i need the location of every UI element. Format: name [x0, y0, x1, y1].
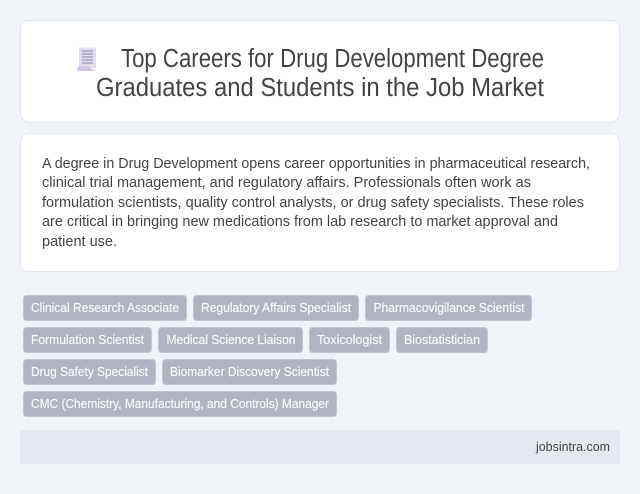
footer bar [20, 430, 620, 464]
tag: Regulatory Affairs Specialist [194, 296, 358, 320]
tag: Drug Safety Specialist: Drug Safety Specialist [31, 365, 148, 379]
tag: Pharmacovigilance Scientist: Pharmacovigilance Scientist [374, 301, 525, 315]
tag: Clinical Research Associate [24, 296, 186, 320]
description text: A degree in Drug Development opens career opportunities in pharmaceutical research, [42, 156, 590, 172]
career tags [24, 296, 532, 416]
panel: title header [20, 20, 620, 122]
tag: Biostatistician: Biostatistician [404, 333, 480, 347]
title text [96, 45, 544, 102]
tag: Biomarker Discovery Scientist: Biomarker Discovery Scientist [170, 365, 330, 379]
tag: Clinical Research Associate: Clinical Research Associate [31, 301, 179, 315]
panel: description [20, 134, 620, 272]
title text: Top Careers for Drug Development Degree [121, 45, 544, 73]
tag: Formulation Scientist: Formulation Scientist [31, 333, 145, 347]
tag: Pharmacovigilance Scientist [366, 296, 532, 320]
footer source text: jobsintra.com [535, 439, 610, 454]
tag: Biostatistician [396, 328, 488, 352]
tag: Biomarker Discovery Scientist [162, 360, 336, 384]
tag: Toxicologist: Toxicologist [317, 333, 383, 347]
tag: CMC Manager [24, 392, 336, 416]
description text: patient use. [42, 234, 117, 250]
description text [42, 156, 590, 250]
tag: Drug Safety Specialist [24, 360, 156, 384]
description text: are critical in bringing new medications from lab research to market approval and [42, 214, 558, 230]
description text: formulation scientists, quality control analysts, or drug safety specialists. These roles [42, 195, 584, 211]
tag: Regulatory Affairs Specialist: Regulatory Affairs Specialist [201, 301, 352, 315]
description text: clinical trial management, and regulatory affairs. Professionals often work as [42, 175, 531, 191]
title text: Graduates and Students in the Job Market [96, 74, 544, 102]
tag: CMC Manager: CMC (Chemistry, Manufacturing, and Controls) Manager [31, 397, 329, 411]
tag: Medical Science Liaison: Medical Science Liaison [166, 333, 296, 347]
icon: document scroll [77, 48, 96, 71]
tag: Medical Science Liaison [158, 328, 302, 352]
tag: Formulation Scientist [24, 328, 152, 352]
tag: Toxicologist [310, 328, 390, 352]
